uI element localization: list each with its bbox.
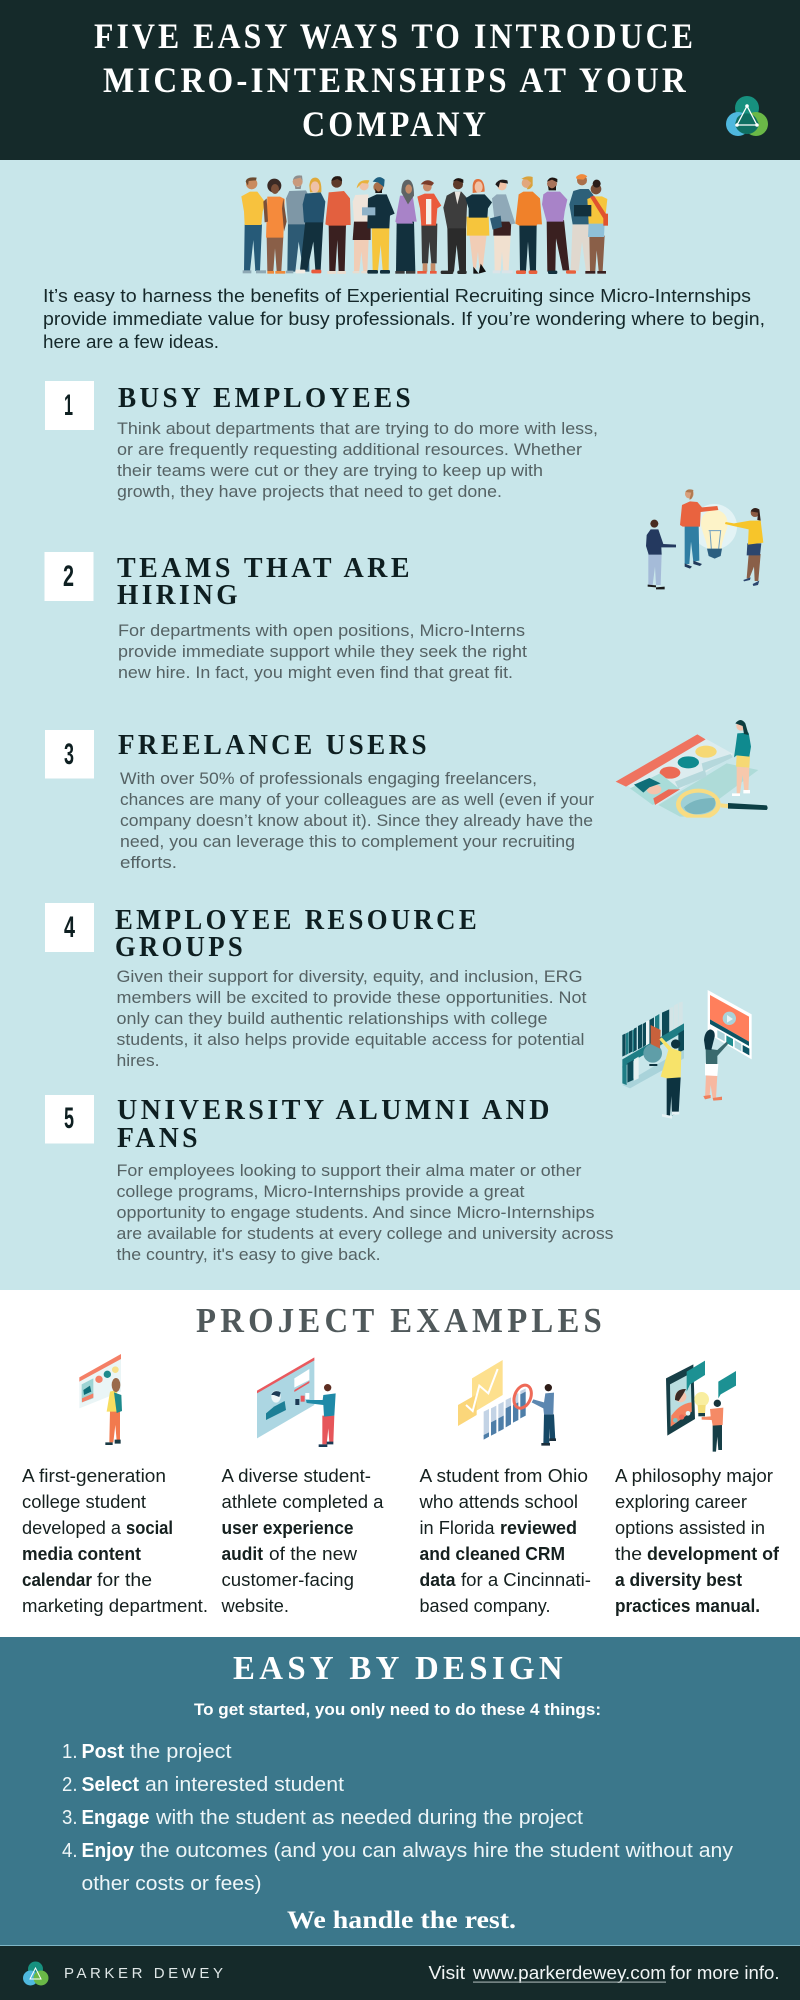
step 4: 4. <box>62 1840 78 1862</box>
heading 2 <box>117 552 413 611</box>
body 4: students, it also helps provide equitable access for potential <box>116 1030 584 1049</box>
number box 1: 1 <box>64 389 73 422</box>
person 1 <box>241 177 266 273</box>
man in orange sweater <box>680 489 718 569</box>
body 5: college programs, Micro-Internships provide a great <box>116 1182 525 1201</box>
person 9 <box>417 180 441 274</box>
project example 2 text: customer-facing <box>222 1570 354 1590</box>
heading 4 <box>115 904 480 963</box>
body 1: their teams were cut or they are trying to keep up with <box>117 461 543 480</box>
step 4: other costs or fees) <box>82 1873 262 1895</box>
project example 2 text: of the new <box>269 1544 358 1564</box>
body 4: Given their support for diversity, equity, and inclusion, ERG <box>116 967 582 986</box>
heading 4: GROUPS <box>115 931 246 963</box>
title: MICRO-INTERNSHIPS AT YOUR <box>103 60 689 100</box>
step 2: an interested student <box>145 1774 344 1796</box>
subtitle: To get started, you only need to do these 4 things: <box>194 1700 601 1719</box>
project example 2 text: audit <box>222 1544 263 1564</box>
body 1: or are frequently requesting additional resources. Whether <box>117 440 582 459</box>
project example 4 text: a diversity best <box>615 1570 742 1590</box>
body 3: company doesn’t know about it). Since they already have the <box>120 811 593 830</box>
header band <box>0 0 800 160</box>
person 6 <box>353 180 371 273</box>
body 4: members will be excited to provide these opportunities. Not <box>116 988 587 1007</box>
footer link text: Visit <box>428 1963 465 1983</box>
man in navy sweater <box>646 520 676 589</box>
project example 3 text: data <box>420 1570 456 1590</box>
heading: project examples: PROJECT EXAMPLES <box>196 1301 606 1340</box>
project example 1 text: media content <box>22 1544 141 1564</box>
number box 2 <box>44 552 94 601</box>
step 4 <box>62 1840 733 1895</box>
person 15 <box>567 174 593 274</box>
panel: item 2 teams that are hiring <box>44 552 527 682</box>
panel: item 5 university alumni and fans <box>45 1094 614 1264</box>
project example 4 text: A philosophy major <box>615 1466 773 1486</box>
project example 3 text: in Florida <box>420 1518 496 1538</box>
body 4: hires. <box>116 1051 160 1070</box>
project example 3 text: reviewed <box>500 1518 577 1538</box>
step 3: Engage <box>82 1807 150 1829</box>
project example 1 text: developed a <box>22 1518 122 1538</box>
footer link text: for more info. <box>670 1963 780 1983</box>
project example 3 text: A student from Ohio <box>420 1466 588 1486</box>
project example 4 text <box>615 1466 780 1616</box>
body 3: efforts. <box>120 853 177 872</box>
project example 4 text: development of <box>647 1544 780 1564</box>
panel: easy by design <box>0 1637 800 1945</box>
body 5: the country, it's easy to give back. <box>116 1245 380 1264</box>
illustration: group of diverse people <box>241 174 608 274</box>
person 2 <box>263 179 287 274</box>
step 2: 2. <box>62 1774 78 1796</box>
heading 5: UNIVERSITY ALUMNI AND <box>117 1094 553 1126</box>
project example 3 text: for a Cincinnati- <box>461 1570 591 1590</box>
person 3 <box>286 175 309 273</box>
number box 3 <box>45 730 94 778</box>
step 3: 3. <box>62 1807 78 1829</box>
project example 1 text: A first-generation <box>22 1466 166 1486</box>
project example 4 text: the <box>615 1544 642 1564</box>
heading 5 <box>117 1094 553 1154</box>
project example 2 text: athlete completed a <box>222 1492 385 1512</box>
body 2: new hire. In fact, you might even find that great fit. <box>118 663 513 682</box>
number box 3: 3 <box>64 738 74 771</box>
body 2 <box>118 621 527 682</box>
heading 5: FANS <box>117 1122 201 1154</box>
person 16 <box>574 180 608 274</box>
footer wordmark: PARKER DEWEY <box>64 1965 223 1982</box>
project example 4 text: exploring career <box>615 1492 747 1512</box>
heading 3: FREELANCE USERS <box>118 729 430 761</box>
illustration: library and video screen <box>622 990 752 1119</box>
person 4 <box>295 178 325 273</box>
illustration: team around a light bulb <box>616 489 768 823</box>
illustration: woman inspecting profile with magnifier <box>616 720 768 823</box>
intro text: It’s easy to harness the benefits of Experiential Recruiting since Micro-Internships <box>43 286 751 306</box>
step 1: Post <box>82 1741 124 1763</box>
project example 1 text: marketing department. <box>22 1596 208 1616</box>
step 2 <box>62 1774 344 1796</box>
number box 5: 5 <box>64 1102 74 1135</box>
body 1: Think about departments that are trying to do more with less, <box>117 419 598 438</box>
body 3 <box>120 769 594 872</box>
heading 2: HIRING <box>117 579 241 611</box>
project example 1 text <box>22 1466 208 1616</box>
body 5: opportunity to engage students. And since Micro-Internships <box>116 1203 594 1222</box>
step 2: Select <box>82 1774 139 1796</box>
project example 1 text: calendar <box>22 1570 92 1590</box>
step 4: Enjoy <box>82 1840 135 1862</box>
project example 2 text: A diverse student- <box>222 1466 371 1486</box>
body 3: chances are many of your colleagues are as well (even if your <box>120 790 594 809</box>
project example 1 text: social <box>126 1518 173 1538</box>
footer link text <box>428 1963 780 1983</box>
number box 4 <box>45 903 94 952</box>
body 3: With over 50% of professionals engaging freelancers, <box>120 769 537 788</box>
step 1: 1. <box>62 1741 78 1763</box>
intro text <box>43 286 765 352</box>
step 3: with the student as needed during the project <box>155 1807 583 1829</box>
number box 2: 2 <box>63 560 74 593</box>
heading: easy by design: EASY BY DESIGN <box>233 1650 567 1687</box>
heading 2: TEAMS THAT ARE <box>117 552 413 584</box>
woman in yellow sweater <box>725 508 763 586</box>
panel: item 3 freelance users <box>45 729 594 872</box>
illustration: student-athlete auditing user experience <box>257 1357 336 1447</box>
illustration: student with social media panel <box>79 1354 122 1445</box>
project example 4 text: options assisted in <box>615 1518 765 1538</box>
body 1: growth, they have projects that need to get done. <box>117 482 502 501</box>
step 1: the project <box>130 1741 232 1763</box>
heading 1: BUSY EMPLOYEES <box>118 382 414 414</box>
body 4: only can they build authentic relationships with college <box>116 1009 548 1028</box>
person 12 <box>490 180 515 273</box>
body 2: provide immediate support while they seek the right <box>118 642 527 661</box>
woman at screen <box>703 1029 728 1101</box>
body 5: are available for students at every college and university across <box>116 1224 614 1243</box>
person 7 <box>362 177 395 274</box>
project example 3 text: who attends school <box>418 1492 578 1512</box>
video screen <box>708 990 752 1059</box>
intro text: provide immediate value for busy professionals. If you’re wondering where to begin, <box>43 309 765 329</box>
project example 2 text: user experience <box>222 1518 354 1538</box>
person 11 <box>465 179 492 274</box>
project example 2 text <box>220 1466 385 1616</box>
number box 5 <box>45 1095 94 1144</box>
project example 2 text: website. <box>220 1596 289 1616</box>
illustration: philosophy major with phone <box>666 1361 736 1452</box>
icon: footer logo <box>23 1962 48 1986</box>
man reaching for book <box>659 1037 681 1119</box>
footer band <box>0 1945 800 2000</box>
footer link text: www.parkerdewey.com <box>472 1963 666 1983</box>
panel: item 4 employee resource groups <box>45 903 587 1070</box>
body 4 <box>116 967 587 1070</box>
title <box>94 16 696 144</box>
project example 3 text: based company. <box>420 1596 550 1616</box>
step 1 <box>62 1741 232 1763</box>
panel: item 1 busy employees <box>45 381 598 501</box>
illustration: analyst reviewing CRM data <box>458 1360 556 1446</box>
person 5 <box>325 176 351 274</box>
body 2: For departments with open positions, Micro-Interns <box>118 621 525 640</box>
number box 4: 4 <box>64 911 75 944</box>
project example 1 text: for the <box>97 1570 152 1590</box>
title: COMPANY <box>302 104 489 144</box>
person 8 <box>395 180 417 274</box>
project example 3 text <box>418 1466 591 1616</box>
heading 4: EMPLOYEE RESOURCE <box>115 904 480 936</box>
person 13 <box>515 176 542 274</box>
body 5: For employees looking to support their alma mater or other <box>116 1161 582 1180</box>
closing line: We handle the rest. <box>287 1907 516 1934</box>
body 1 <box>117 419 598 501</box>
project example 1 text: college student <box>22 1492 146 1512</box>
step 4: the outcomes (and you can always hire the student without any <box>140 1840 733 1862</box>
icon: Parker Dewey logo <box>726 96 768 136</box>
project example 4 text: practices manual. <box>615 1596 760 1616</box>
panel: project examples <box>0 1290 800 1637</box>
person 10 <box>441 178 467 274</box>
person 14 <box>542 177 576 274</box>
number box 1 <box>45 381 94 430</box>
project example 3 text: and cleaned CRM <box>420 1544 565 1564</box>
title: FIVE EASY WAYS TO INTRODUCE <box>94 16 696 56</box>
body 5 <box>116 1161 614 1264</box>
page background <box>0 160 800 1290</box>
body 3: need, you can leverage this to complement your recruiting <box>120 832 575 851</box>
intro text: here are a few ideas. <box>43 332 219 352</box>
